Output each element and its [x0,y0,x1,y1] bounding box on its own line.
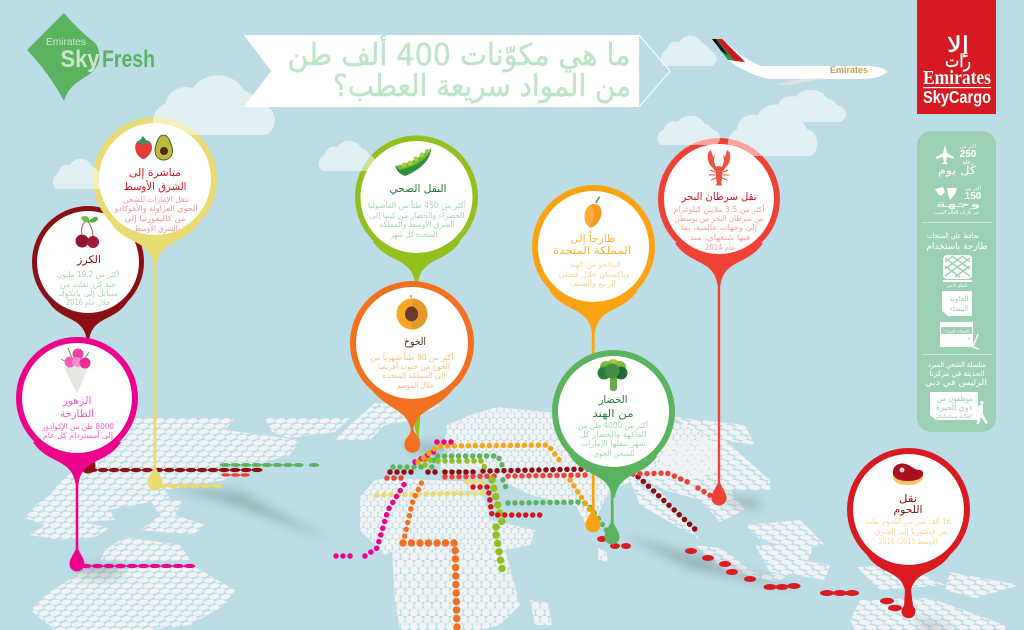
text: cold chain hub [925,360,987,388]
plane [712,39,887,85]
icon: white container [942,291,972,316]
pin: mango [532,185,655,532]
title: من المواد سريعة العطب؟ [333,69,631,104]
heading: meat transport: نقل [899,493,917,505]
title: ما هي مكوّنات 400 ألف طن [288,34,630,73]
heading: fresh to the UK: المملكة المتحدة [553,245,631,257]
title [288,34,631,104]
stat: 150 destinations [934,185,982,216]
heading: fresh flowers: الزهور [61,395,92,407]
text: cold chain hub: الحديثة في مركزنا [930,369,984,378]
text: cold chain hub: سلسلة الشحن المبرد [928,360,986,369]
text: peach: أكثر من 80 طناً شهرياً من [370,351,454,362]
icon: pea pod [395,148,431,176]
icon: world map [935,187,957,200]
stat: 150 destinations: أكثر من [965,185,982,192]
logo: Emirates SkyFresh: Emirates [46,36,86,48]
text: peach: الخوخ من جنوب أفريقيا [378,361,450,371]
pin: meat [847,448,970,618]
pin: flowers [16,337,138,572]
stat: 250 flights: رحلة [962,159,974,166]
icon: cold dolly: * [968,337,971,344]
heading: fresh flowers: الطازجة [60,408,94,420]
text: broccoli: للشحن الجوي [594,449,634,458]
logo: Emirates SkyFresh: Sky [60,46,100,73]
text: lobster: إلى وجهات عالمية، بما [681,223,757,232]
text: flowers: إلى أمستردام كل عام [43,430,113,440]
icon: lobster [708,150,730,186]
route: meat [597,536,902,611]
dotted world map [25,403,1020,630]
text: strawberries and avocado: الشرق الأوسط [134,223,178,233]
text: meat: من فيكتوريا إلى الشرق [874,527,948,536]
route: green broccoli [225,456,610,535]
text: strawberries and avocado: الجوي الفراولة والأفوكادو [113,203,198,213]
stat: 150 destinations: 150 [965,191,982,202]
heading: fresh to the UK [553,231,631,257]
text: peach: إلى المملكة المتحدة [382,371,446,380]
text: cherries: حبة كرز نقلت من [60,280,116,289]
text: peach [370,351,454,390]
route: cherry dark red [92,469,698,532]
icon: mango [584,197,601,227]
text: lobster [674,204,764,252]
heading: direct to the Middle East [124,167,186,193]
heading: fresh to the UK: طازجاً إلى [570,231,616,245]
text: flowers [41,422,114,440]
icon: broccoli [598,359,628,391]
text: cherries: خلال عام 2016 [66,298,110,307]
text: peas [368,199,466,239]
text: lobster: من سرطان البحر من بوسطن [674,214,764,223]
text: broccoli: شهر تنقلها الإمارات [580,439,646,448]
icon: plane [936,145,954,164]
text: broccoli: الفاكهة والخضار كل [580,430,646,439]
text: keeping products fresh [926,232,988,252]
text: broccoli [578,420,648,458]
pin: strawberries and avocado [93,117,217,490]
text: keeping products fresh: نحافظ على المنتجات [927,232,979,240]
text: lobster: أكثر من 3.5 ملايين كيلوغرام [674,204,764,214]
text: cherries [57,269,119,307]
icon: strawberry [135,136,152,159]
pin: peach [350,281,474,453]
text: peas: المتحدة كل شهر [390,230,438,239]
icon: cold dolly: المنتجات المبردة [945,330,969,334]
icon: white pallet net [943,255,972,289]
pin: peas [355,136,478,440]
heading: vegetables from India [592,394,634,420]
icon: expert staff box: ذوي الخبرة [936,403,972,412]
route: orange peach [403,458,428,543]
heading: fresh flowers [60,395,94,420]
icon: white container: البيضاء [950,305,968,313]
icon: expert staff box: موظفون من [937,394,973,403]
sidebar panel [917,131,996,432]
plane: Emirates [830,65,868,75]
text: meat: الأوسط 2015/ 2016 [878,536,938,546]
text: broccoli: أكثر من 4000 طن من [578,420,648,430]
text: lobster: عام 2014 [705,243,735,252]
logo: Emirates SkyCargo [917,0,996,114]
heading: vegetables from India: الخضار [598,394,628,406]
text: cherries: أكثر من 19.2 مليون [57,269,119,279]
route: red to India [473,487,540,515]
logo: Emirates SkyCargo: رات [945,51,971,72]
icon: peach [396,295,428,330]
icon: avocado [155,135,173,160]
logo: Emirates SkyCargo: إلا [947,33,969,58]
pin: cherries [32,206,144,474]
stat: 250 flights: كل يوم [938,164,977,177]
text: keeping products fresh: طازجة باستخدام [926,242,988,252]
divider [922,222,992,223]
logo: Emirates SkyFresh: Fresh [102,46,155,73]
text: cherries: سياتل إلى بانكوك [58,289,118,298]
heading: direct to the Middle East: مباشرة إلى [129,167,181,179]
pin: broccoli [552,350,675,544]
text: peach: خلال الموسم [396,381,434,390]
route: red lobster [226,473,713,497]
text: mango [558,260,630,288]
divider [922,354,992,355]
stat: 250 flights: أكثر من [960,143,977,150]
icon: expert staff box [930,392,988,424]
route: pink flowers [86,442,458,566]
stat: 250 flights: 250 [960,149,977,160]
stat: 150 destinations: عبر قارات العالم الست [934,210,980,216]
stat: 250 flights [938,143,977,177]
text: meat: 16 ألف طن من اللحوم نقلت [865,516,951,526]
stat: 150 destinations: وجهة [936,200,980,210]
icon: cold dolly [940,322,979,349]
heading: vegetables from India: من الهند [592,408,634,420]
text: meat [865,516,951,546]
icon: expert staff box: العالية بسلسلتكم [936,414,972,420]
logo: Emirates SkyCargo: SkyCargo [923,87,991,107]
text: flowers: 8000 طن من الإكوادور [41,422,114,431]
icon: cherries [76,216,99,248]
text: strawberries and avocado: من كاليفورنيا إلى [124,214,186,223]
map shadows [75,442,960,630]
text: mango: الربيع والصيف [570,279,616,288]
text: mango: وباكستان خلال فصلي [558,270,630,279]
text: strawberries and avocado [113,195,198,233]
pin: lobster [658,138,780,506]
text: peas: أكثر من 450 طناً من الفاصوليا [368,199,466,210]
logo: Emirates SkyCargo: Emirates [923,67,991,89]
clouds [53,36,846,189]
heading: peach: الخوخ [404,336,426,348]
icon: white pallet net: النطاق الأبيض [947,282,967,289]
heading: lobster transport: نقل سرطان البحر [681,191,756,203]
text: peas: الشرق الأوسط والمملكة [380,219,454,229]
heading: meat transport: اللحوم [894,504,922,516]
heading: meat transport [894,493,922,516]
text: strawberries and avocado: تنقل الإمارات للشحن [123,195,189,204]
text: mango: المانجو من الهند [570,260,620,269]
icon: person pushing [974,401,988,424]
logo: Emirates SkyFresh [27,13,155,101]
heading: direct to the Middle East: الشرق الأوسط [124,180,186,193]
route: lime peas [425,458,485,468]
heading: cherries: الكرز [76,254,101,266]
route: mango [418,445,593,515]
text: peas: الخضراء والخضار من كينيا إلى [370,211,464,220]
icon: bouquet [61,348,90,394]
icon: white container: الحاوية [950,295,969,303]
text: lobster: فيها شنغهاي، منذ [690,233,750,242]
title ribbon [244,34,670,107]
heading: healthy transport: النقل الصحي [390,183,446,195]
icon: meat [893,463,923,485]
route lines [86,442,902,630]
text: cold chain hub: الرئيس في دبي [925,378,987,388]
route: yellow avocado [162,482,483,495]
